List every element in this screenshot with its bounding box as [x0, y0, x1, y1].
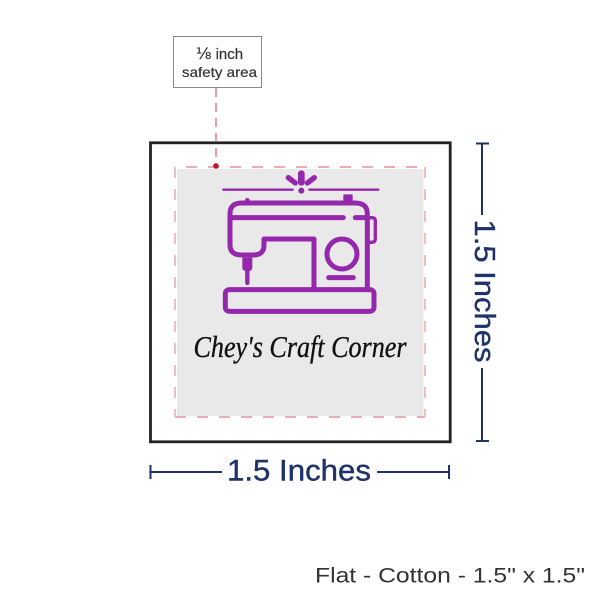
callout: safety area note [174, 36, 262, 88]
safety area gray panel [177, 169, 424, 416]
callout leader line with dot [213, 88, 219, 169]
callout: safety area note: safety area [182, 64, 257, 80]
width dimension: 1.5 Inches [227, 454, 371, 488]
brand name text: Chey's Craft Corner [194, 329, 407, 364]
thread line and spark [223, 174, 378, 194]
icon: sewing machine [223, 174, 378, 311]
safety area dashed outline [175, 167, 425, 417]
machine body [230, 203, 367, 288]
spool pin and knob [343, 194, 353, 203]
height dimension: 1.5 Inches [468, 220, 500, 362]
hand wheel and slot [327, 239, 357, 269]
callout: safety area note: ⅛ inch [196, 44, 243, 63]
label outer boundary [150, 143, 450, 442]
product caption: Flat - Cotton - 1.5" x 1.5" [315, 564, 585, 588]
needle [242, 258, 252, 271]
base [225, 290, 374, 311]
